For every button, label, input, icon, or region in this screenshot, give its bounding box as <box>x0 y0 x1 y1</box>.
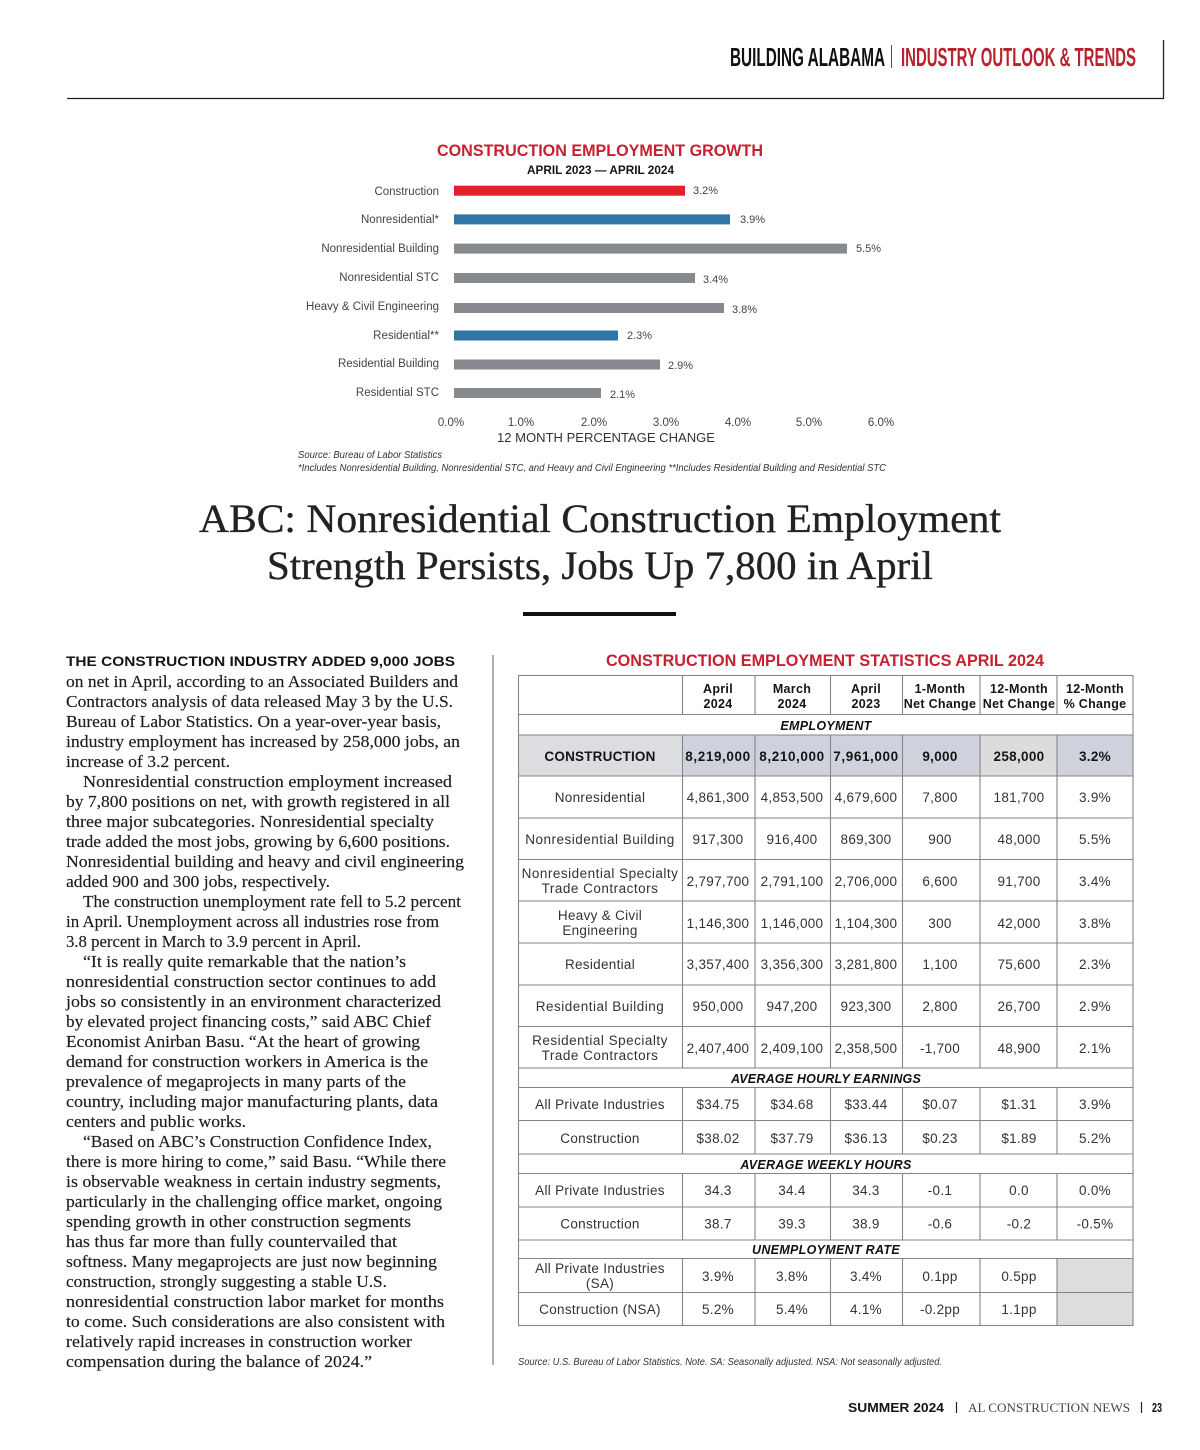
row: residential specialty: 2,358,500 <box>835 1041 897 1056</box>
chart source note: Source: Bureau of Labor Statistics <box>298 450 442 461</box>
article body text: relatively rapid increases in construction worker <box>66 1332 413 1351</box>
bar chart: construction employment growth: Heavy & Civil Engineering <box>306 301 439 313</box>
chart source note <box>298 450 887 474</box>
article body text: nonresidential construction labor market for months <box>66 1292 444 1311</box>
bar chart: construction employment growth: 2.9% <box>668 360 693 372</box>
row: residential: Residential <box>565 957 635 972</box>
row: weekly construction <box>560 1216 1113 1232</box>
bar chart: construction employment growth: 5.0% <box>796 417 822 429</box>
row: weekly all private: 34.3 <box>704 1183 732 1198</box>
row: heavy and civil: Heavy & Civil <box>558 908 642 923</box>
headline rule <box>523 612 676 616</box>
article body text: Economist Anirban Basu. “At the heart of growing <box>66 1032 420 1051</box>
bar chart: construction employment growth: 2.0% <box>581 417 607 429</box>
article body text: by elevated project financing costs,” said ABC Chief <box>66 1012 432 1031</box>
row: unemployment construction <box>539 1302 1037 1317</box>
row: residential: 2.3% <box>1079 957 1111 972</box>
article body text: The construction unemployment rate fell to 5.2 percent <box>83 892 461 911</box>
section: unemployment rate: UNEMPLOYMENT RATE <box>752 1243 900 1257</box>
article body text: 3.8 percent in March to 3.9 percent in April. <box>66 932 361 951</box>
bar chart: construction employment growth: Residential STC <box>356 387 439 399</box>
row: residential: 75,600 <box>997 957 1041 972</box>
table column headers: 1-Month <box>915 682 965 696</box>
row: construction total: 3.2% <box>1079 749 1111 764</box>
article body text: jobs so consistently in an environment characterized <box>65 992 442 1011</box>
row: hourly all private: $1.31 <box>1001 1097 1037 1112</box>
article body text: to come. Such considerations are also consistent with <box>66 1312 446 1331</box>
article body text: softness. Many megaprojects are just now beginning <box>66 1252 437 1271</box>
row: nonresidential specialty: Trade Contractors <box>542 881 658 896</box>
row: weekly construction: 39.3 <box>778 1216 806 1232</box>
row: hourly construction <box>560 1131 1111 1146</box>
row: hourly construction: 5.2% <box>1079 1131 1111 1146</box>
row: hourly all private: $34.75 <box>696 1097 740 1112</box>
table column headers: 2024 <box>703 697 733 711</box>
table source note: Source: U.S. Bureau of Labor Statistics. Note. SA: Seasonally adjusted. NSA: Not seasonally adjusted. <box>518 1357 942 1368</box>
row: heavy and civil: 300 <box>928 916 952 931</box>
row: weekly construction: 38.7 <box>704 1216 732 1232</box>
row: residential: 1,100 <box>922 957 958 972</box>
row: unemployment all private: 3.4% <box>850 1269 882 1284</box>
row: weekly all private: 34.4 <box>778 1183 806 1198</box>
bar chart: construction employment growth: 2.3% <box>627 330 652 342</box>
row: construction total <box>544 749 1111 764</box>
row: nonresidential building: 5.5% <box>1079 832 1111 847</box>
row: hourly construction: $36.13 <box>844 1131 888 1146</box>
row: unemployment construction: 4.1% <box>850 1302 882 1317</box>
article headline <box>199 496 1001 588</box>
row: unemployment construction: Construction (NSA) <box>539 1302 661 1317</box>
table column headers: Net Change <box>904 697 976 711</box>
bar chart: construction employment growth: 5.5% <box>856 243 881 255</box>
row: hourly all private: 3.9% <box>1079 1097 1111 1112</box>
article headline: ABC: Nonresidential Construction Employment <box>199 496 1001 541</box>
bar chart: construction employment growth: 3.8% <box>732 304 757 316</box>
page footer: 23 <box>1152 1401 1162 1415</box>
row: residential specialty: 48,900 <box>997 1041 1041 1056</box>
chart title: CONSTRUCTION EMPLOYMENT GROWTH <box>437 141 763 160</box>
row: residential specialty: 2,409,100 <box>761 1041 823 1056</box>
bar chart: construction employment growth: 1.0% <box>508 417 534 429</box>
bar chart: construction employment growth: 6.0% <box>868 417 894 429</box>
row: nonresidential specialty: 2,791,100 <box>761 874 823 889</box>
row: nonresidential building: 869,300 <box>841 832 891 847</box>
row: nonresidential specialty: 3.4% <box>1079 874 1111 889</box>
statistics table <box>518 675 1133 1326</box>
row: unemployment all private: 0.5pp <box>1001 1269 1037 1284</box>
table column headers: Net Change <box>983 697 1055 711</box>
row: nonresidential: 4,679,600 <box>835 790 897 805</box>
row: weekly construction: -0.2 <box>1007 1216 1031 1232</box>
page footer: SUMMER 2024 <box>848 1401 944 1415</box>
row: construction total: 258,000 <box>994 749 1044 764</box>
row: nonresidential: 181,700 <box>994 790 1044 805</box>
row: heavy and civil: Engineering <box>562 923 638 938</box>
row: hourly construction: $1.89 <box>1001 1131 1037 1146</box>
table column headers: 2023 <box>851 697 881 711</box>
article body text: there is more hiring to come,” said Basu. “While there <box>66 1152 446 1171</box>
row: residential specialty: Trade Contractors <box>542 1048 658 1063</box>
article body text: Nonresidential building and heavy and civil engineering <box>66 852 464 871</box>
bar chart: construction employment growth: 3.0% <box>653 417 679 429</box>
article body text: added 900 and 300 jobs, respectively. <box>66 872 330 891</box>
row: weekly construction: Construction <box>560 1216 640 1232</box>
row: unemployment all private: (SA) <box>586 1276 614 1291</box>
article body text: three major subcategories. Nonresidential specialty <box>66 812 435 831</box>
row: hourly all private: $33.44 <box>844 1097 888 1112</box>
section: average weekly hours: AVERAGE WEEKLY HOURS <box>739 1158 912 1172</box>
row: construction total: 8,219,000 <box>685 749 751 764</box>
row: nonresidential specialty: 2,706,000 <box>835 874 897 889</box>
row: heavy and civil: 1,146,000 <box>761 916 823 931</box>
row: heavy and civil <box>558 908 1111 938</box>
article body text: particularly in the challenging office market, ongoing <box>66 1192 442 1211</box>
article body text: demand for construction workers in America is the <box>66 1052 428 1071</box>
article body text: in April. Unemployment across all industries rose from <box>66 912 439 931</box>
chart title <box>437 141 763 177</box>
row: weekly all private: -0.1 <box>928 1183 952 1198</box>
article body text: industry employment has increased by 258,000 jobs, an <box>66 732 460 751</box>
row: residential building: Residential Building <box>536 999 664 1014</box>
row: residential building <box>536 999 1111 1014</box>
article body text: country, including major manufacturing plants, data <box>66 1092 439 1111</box>
row: hourly all private: $34.68 <box>770 1097 814 1112</box>
row: nonresidential: 3.9% <box>1079 790 1111 805</box>
row: residential building: 923,300 <box>841 999 891 1014</box>
bar chart: construction employment growth: 0.0% <box>438 417 464 429</box>
article body text: centers and public works. <box>66 1112 246 1131</box>
table column headers: March <box>773 682 811 696</box>
row: unemployment all private: 3.9% <box>702 1269 734 1284</box>
row: residential specialty: 2,407,400 <box>687 1041 749 1056</box>
page header <box>67 40 1164 98</box>
row: residential building: 2.9% <box>1079 999 1111 1014</box>
article body text: Nonresidential construction employment increased <box>83 772 453 791</box>
row: heavy and civil: 1,104,300 <box>835 916 897 931</box>
row: weekly all private: 0.0 <box>1009 1183 1029 1198</box>
row: nonresidential building: 48,000 <box>997 832 1041 847</box>
row: hourly construction: $38.02 <box>696 1131 740 1146</box>
chart source note: *Includes Nonresidential Building, Nonresidential STC, and Heavy and Civil Engineering **Includes Residential Building and Residential STC <box>298 463 887 474</box>
article body text: “It is really quite remarkable that the nation’s <box>83 952 406 971</box>
bar chart: construction employment growth: 3.4% <box>703 274 728 286</box>
bar chart: construction employment growth: Nonresidential* <box>361 214 440 226</box>
bar chart: construction employment growth: 4.0% <box>725 417 751 429</box>
bar chart: construction employment growth: 2.1% <box>610 389 635 401</box>
row: nonresidential: 4,853,500 <box>761 790 823 805</box>
row: unemployment construction: 1.1pp <box>1001 1302 1037 1317</box>
row: construction total: CONSTRUCTION <box>544 749 656 764</box>
table column headers: 12-Month <box>1066 682 1124 696</box>
row: hourly all private <box>535 1097 1111 1112</box>
article body text: on net in April, according to an Associated Builders and <box>66 672 459 691</box>
bar chart: construction employment growth: 3.9% <box>740 214 765 226</box>
article body text: Bureau of Labor Statistics. On a year-over-year basis, <box>66 712 441 731</box>
bar chart: construction employment growth: 12 MONTH PERCENTAGE CHANGE <box>497 430 715 445</box>
row: heavy and civil: 3.8% <box>1079 916 1111 931</box>
row: nonresidential specialty: 2,797,700 <box>687 874 749 889</box>
row: construction total: 7,961,000 <box>833 749 899 764</box>
row: residential building: 26,700 <box>997 999 1041 1014</box>
article body text: nonresidential construction sector continues to add <box>66 972 437 991</box>
row: hourly all private: $0.07 <box>922 1097 958 1112</box>
row: nonresidential: 7,800 <box>922 790 958 805</box>
page footer: AL CONSTRUCTION NEWS <box>968 1400 1130 1415</box>
row: unemployment construction: 5.2% <box>702 1302 734 1317</box>
row: hourly construction: $37.79 <box>770 1131 814 1146</box>
table column headers: 2024 <box>777 697 807 711</box>
row: residential: 3,357,400 <box>687 957 749 972</box>
row: nonresidential building: 916,400 <box>767 832 817 847</box>
row: weekly all private <box>535 1183 1111 1198</box>
row: nonresidential building: 900 <box>928 832 952 847</box>
row: residential specialty <box>532 1033 1111 1063</box>
row: residential: 3,281,800 <box>835 957 897 972</box>
section: employment: EMPLOYMENT <box>780 719 873 733</box>
row: hourly construction: $0.23 <box>922 1131 958 1146</box>
article body text: Contractors analysis of data released May 3 by the U.S. <box>66 692 453 711</box>
column divider <box>492 655 494 1365</box>
row: nonresidential specialty: Nonresidential Specialty <box>522 866 678 881</box>
row: hourly all private: All Private Industries <box>535 1097 665 1112</box>
row: heavy and civil: 42,000 <box>997 916 1041 931</box>
row: unemployment all private: All Private Industries <box>535 1261 665 1276</box>
chart title: APRIL 2023 — APRIL 2024 <box>527 165 675 177</box>
row: residential building: 2,800 <box>922 999 958 1014</box>
row: residential specialty: -1,700 <box>920 1041 960 1056</box>
page header: BUILDING ALABAMA <box>730 42 885 72</box>
bar chart: construction employment growth: 3.2% <box>693 185 718 197</box>
row: unemployment all private <box>535 1261 1037 1291</box>
row: residential building: 950,000 <box>693 999 743 1014</box>
article body text: compensation during the balance of 2024.” <box>66 1352 372 1371</box>
row: nonresidential building: Nonresidential Building <box>525 832 675 847</box>
row: weekly construction: -0.6 <box>928 1216 952 1232</box>
article body text: increase of 3.2 percent. <box>66 752 230 771</box>
article body text: “Based on ABC’s Construction Confidence Index, <box>83 1132 432 1151</box>
row: nonresidential <box>555 790 1111 805</box>
row: residential <box>565 957 1111 972</box>
bar chart: construction employment growth: Residential** <box>373 330 440 342</box>
row: heavy and civil: 1,146,300 <box>687 916 749 931</box>
table column headers: April <box>851 682 881 696</box>
row: unemployment construction: 5.4% <box>776 1302 808 1317</box>
bar chart: construction employment growth: Nonresidential STC <box>339 272 439 284</box>
bar chart: construction employment growth <box>306 185 894 445</box>
table column headers: April <box>703 682 733 696</box>
row: residential: 3,356,300 <box>761 957 823 972</box>
article body text: is observable weakness in certain industry segments, <box>66 1172 441 1191</box>
article body text: prevalence of megaprojects in many parts of the <box>66 1072 406 1091</box>
article headline: Strength Persists, Jobs Up 7,800 in April <box>267 543 933 588</box>
row: weekly construction: 38.9 <box>852 1216 880 1232</box>
row: residential specialty: 2.1% <box>1079 1041 1111 1056</box>
row: nonresidential specialty: 6,600 <box>922 874 958 889</box>
row: nonresidential building: 917,300 <box>693 832 743 847</box>
row: nonresidential: 4,861,300 <box>687 790 749 805</box>
bar chart: construction employment growth: Nonresidential Building <box>321 243 439 255</box>
article body text: construction, strongly suggesting a stable U.S. <box>66 1272 387 1291</box>
table title: CONSTRUCTION EMPLOYMENT STATISTICS APRIL 2024 <box>606 651 1045 670</box>
bar chart: construction employment growth: Construction <box>374 186 439 198</box>
row: residential building: 947,200 <box>767 999 817 1014</box>
section: average hourly earnings: AVERAGE HOURLY EARNINGS <box>730 1072 921 1086</box>
row: nonresidential building <box>525 832 1111 847</box>
article body text: trade added the most jobs, growing by 6,600 positions. <box>66 832 450 851</box>
row: unemployment construction: -0.2pp <box>920 1302 960 1317</box>
article body text: spending growth in other construction segments <box>66 1212 411 1231</box>
article body text <box>65 653 464 1371</box>
article body text: THE CONSTRUCTION INDUSTRY ADDED 9,000 JOBS <box>66 653 455 669</box>
row: nonresidential specialty: 91,700 <box>997 874 1041 889</box>
bar chart: construction employment growth: Residential Building <box>338 358 439 370</box>
table column headers: % Change <box>1064 697 1126 711</box>
row: weekly all private: 0.0% <box>1079 1183 1111 1198</box>
row: weekly construction: -0.5% <box>1077 1216 1113 1232</box>
row: unemployment all private: 3.8% <box>776 1269 808 1284</box>
row: weekly all private: 34.3 <box>852 1183 880 1198</box>
row: construction total: 9,000 <box>922 749 958 764</box>
article body text: by 7,800 positions on net, with growth registered in all <box>66 792 450 811</box>
row: construction total: 8,210,000 <box>759 749 825 764</box>
row: hourly construction: Construction <box>560 1131 640 1146</box>
row: residential specialty: Residential Specialty <box>532 1033 668 1048</box>
table column headers: 12-Month <box>990 682 1048 696</box>
row: nonresidential: Nonresidential <box>555 790 645 805</box>
row: unemployment all private: 0.1pp <box>922 1269 958 1284</box>
row: nonresidential specialty <box>522 866 1111 896</box>
page footer <box>848 1400 1162 1415</box>
row: weekly all private: All Private Industries <box>535 1183 665 1198</box>
article body text: has thus far more than fully countervailed that <box>66 1232 397 1251</box>
table column headers <box>703 682 1126 711</box>
